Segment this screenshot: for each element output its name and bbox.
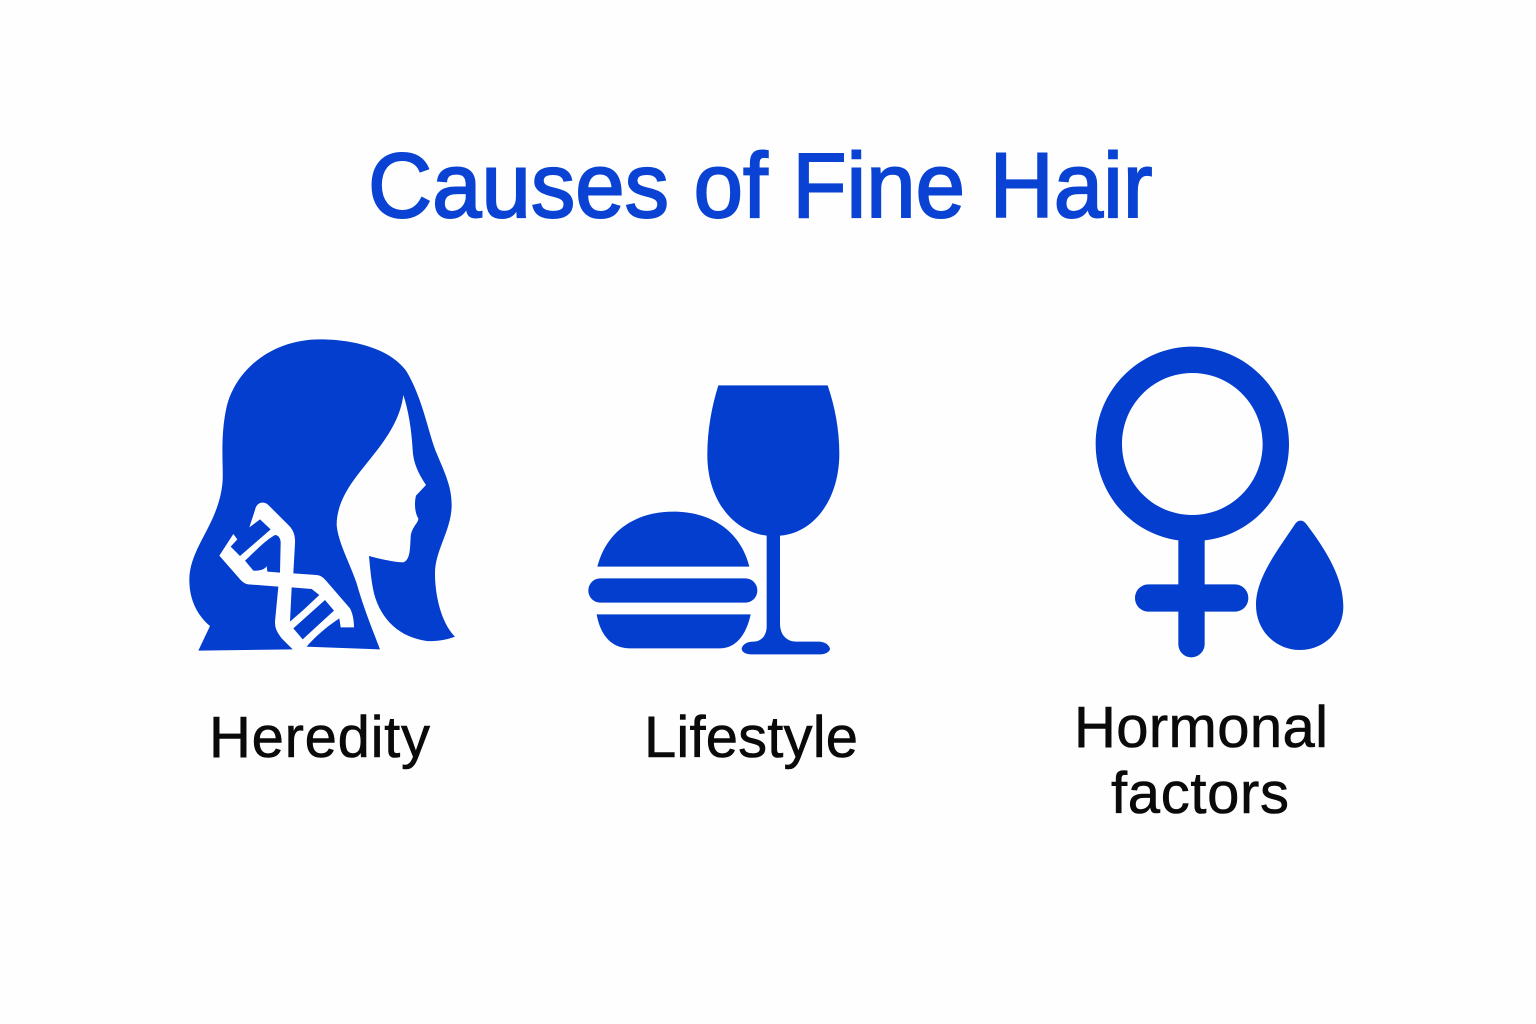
icon: woman profile silhouette bbox=[189, 339, 455, 651]
label: Hormonal factors: Hormonal bbox=[1074, 695, 1328, 760]
icon: wine glass bbox=[707, 385, 839, 654]
panel: lifestyle bbox=[588, 385, 858, 770]
label: Hormonal factors: factors bbox=[1111, 761, 1289, 826]
label: Heredity: Heredity bbox=[209, 705, 430, 770]
icon: hormone drop bbox=[1256, 521, 1343, 650]
title: Causes of Fine Hair bbox=[368, 135, 1152, 237]
icon: female symbol bbox=[1096, 347, 1289, 657]
panel: heredity bbox=[189, 339, 455, 770]
panel: hormonal factors bbox=[1074, 347, 1343, 826]
label: Hormonal factors bbox=[1074, 695, 1328, 826]
icon: DNA helix bbox=[219, 503, 354, 650]
icon: burger bbox=[588, 512, 757, 648]
label: Lifestyle: Lifestyle bbox=[644, 705, 858, 770]
